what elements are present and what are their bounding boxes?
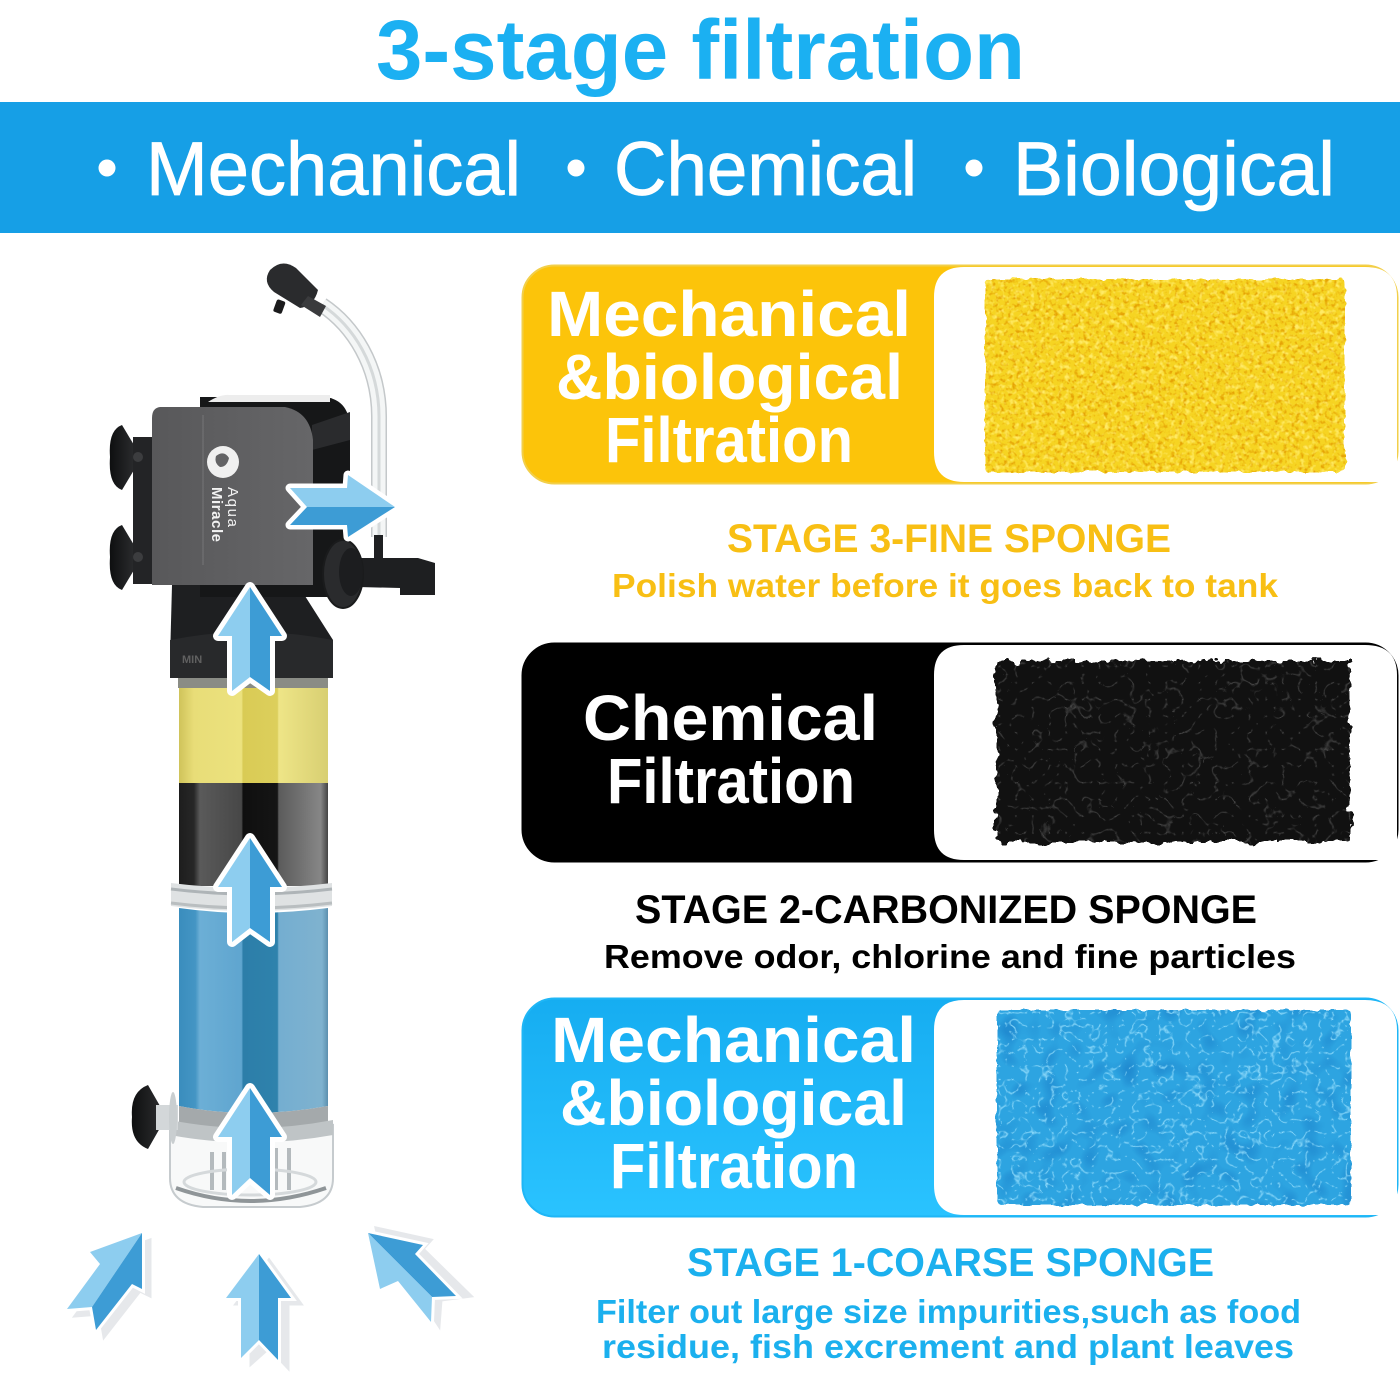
filter chamber: blue stage xyxy=(179,908,328,1113)
text: stage 1 caption: residue, fish excrement and plant leaves xyxy=(602,1328,1294,1365)
filter chamber: yellow stage xyxy=(179,688,328,783)
text: stage 2 caption: Remove odor, chlorine and fine particles xyxy=(604,938,1296,975)
heading: chemical filtration: Chemical xyxy=(583,682,878,754)
clear base xyxy=(170,1106,333,1207)
heading: mechanical and biological filtration: Filtration xyxy=(605,404,853,476)
panel: stage 3 fine sponge xyxy=(522,266,1398,484)
heading: mechanical and biological filtration: Mechanical xyxy=(551,1004,916,1076)
heading: mechanical and biological filtration: &biological xyxy=(556,341,903,413)
icon: air tube xyxy=(322,305,379,537)
banner: filtration types: Biological xyxy=(1013,127,1335,212)
filter chamber: clear joint xyxy=(171,883,332,911)
arrow: flow through base xyxy=(218,1088,282,1195)
heading: mechanical and biological filtration xyxy=(547,278,911,476)
text: stage 1 caption xyxy=(596,1241,1301,1365)
filter chamber: black stage xyxy=(179,783,328,886)
text: stage 3 caption xyxy=(612,517,1279,604)
heading: chemical filtration xyxy=(583,682,878,817)
icon: lower suction cup xyxy=(132,1085,178,1149)
heading: chemical filtration: Filtration xyxy=(607,745,855,817)
arrow: outlet flow xyxy=(290,475,395,537)
motor housing xyxy=(152,395,350,597)
filter product illustration: MIN xyxy=(182,654,202,666)
text: stage 1 caption: Filter out large size impurities,such as food xyxy=(596,1293,1301,1330)
icon: yellow sponge xyxy=(985,279,1345,472)
panel: stage 2 carbonized sponge xyxy=(522,644,1398,862)
arrow: water intake right xyxy=(368,1228,471,1326)
filter product illustration xyxy=(110,263,435,1207)
banner: filtration types xyxy=(0,102,1400,233)
arrow: flow through neck xyxy=(218,587,282,691)
icon: blue sponge xyxy=(997,1010,1351,1205)
collar xyxy=(170,632,333,678)
heading: mechanical and biological filtration: Mechanical xyxy=(547,278,911,350)
text: stage 3 caption: Polish water before it goes back to tank xyxy=(612,567,1279,604)
text: stage 3 caption: STAGE 3-FINE SPONGE xyxy=(727,517,1171,561)
outlet nozzle xyxy=(323,535,435,608)
panel: stage 1 coarse sponge xyxy=(522,998,1398,1216)
banner: filtration types: Mechanical xyxy=(146,127,521,212)
banner: filtration types: Chemical xyxy=(614,127,917,212)
logo: Aqua xyxy=(224,487,241,528)
heading: mechanical and biological filtration: &biological xyxy=(560,1067,907,1139)
icon: suction cups xyxy=(110,425,153,590)
arrow: flow through chamber xyxy=(218,838,282,942)
neck xyxy=(170,585,333,660)
text: stage 1 caption: STAGE 1-COARSE SPONGE xyxy=(687,1241,1214,1285)
clear band under collar xyxy=(178,678,328,688)
icon: air valve xyxy=(267,263,326,317)
icon: black sponge xyxy=(996,661,1350,842)
text: stage 2 caption xyxy=(604,888,1296,975)
logo: Miracle xyxy=(208,487,225,542)
title: 3-stage filtration xyxy=(376,3,1025,97)
arrow: water intake left xyxy=(67,1233,150,1337)
text: stage 2 caption: STAGE 2-CARBONIZED SPONGE xyxy=(635,888,1257,932)
logo xyxy=(207,446,241,542)
arrow: water intake centre xyxy=(226,1254,301,1368)
heading: mechanical and biological filtration xyxy=(551,1004,916,1202)
heading: mechanical and biological filtration: Filtration xyxy=(610,1130,858,1202)
